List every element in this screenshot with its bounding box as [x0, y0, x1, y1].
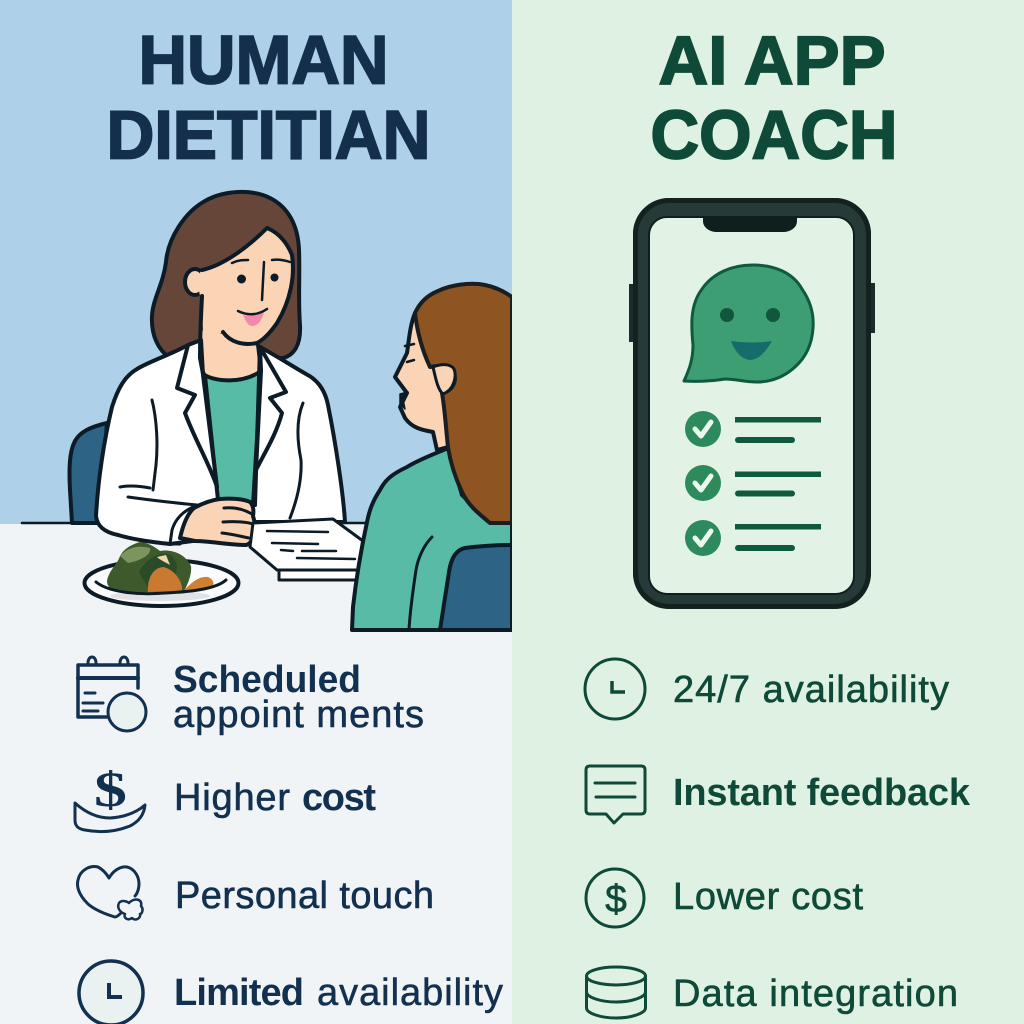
dietitian neck: [188, 330, 260, 380]
right lapel: [256, 347, 286, 470]
item: personal touch: [77, 867, 434, 919]
icon: dollar coin: [586, 869, 644, 927]
dietitian hair: [152, 192, 300, 358]
icon: dollar in hand: [75, 761, 145, 832]
text: 24/7 availability: 24/7 availability: [673, 669, 949, 711]
title: ai app coach: [650, 22, 898, 174]
list: human dietitian features: [75, 657, 503, 1024]
carrot pieces: [148, 567, 182, 592]
text: higher cost: [174, 777, 376, 819]
client ear: [433, 365, 455, 394]
client body: [352, 448, 512, 630]
item: instant feedback: [586, 766, 971, 823]
title: ai app coach: AI APP: [658, 22, 886, 99]
dietitian shirt: [203, 371, 261, 505]
dietitian ear: [185, 269, 205, 295]
illustration: phone: [629, 198, 875, 609]
text: data integration: Data integration: [673, 973, 958, 1015]
document text lines: [267, 531, 355, 559]
icon: database: [586, 967, 646, 1018]
icon: calendar: [78, 657, 146, 731]
side buttons: [629, 283, 875, 342]
coat folds: [120, 400, 303, 518]
phone inner edge: [636, 200, 868, 606]
check item 2: [685, 465, 821, 501]
title: ai app coach: COACH: [650, 96, 898, 174]
text: limited availability: [174, 972, 503, 1014]
text: scheduled appointments: [173, 659, 424, 736]
plate: [84, 560, 238, 606]
item: limited availability: [79, 961, 503, 1024]
dietitian chair: [70, 423, 107, 523]
left lapel: [177, 340, 217, 487]
icon: clock: [79, 961, 143, 1024]
table edge: [22, 522, 366, 524]
documents: [250, 519, 363, 580]
icon: heart and hand: [77, 867, 143, 919]
client mouth: [400, 392, 408, 409]
item: higher cost: [75, 761, 376, 832]
text: limited availability: availability: [317, 972, 503, 1014]
item: 24/7 availability: [585, 659, 949, 719]
text: limited availability: Limited: [174, 972, 304, 1014]
client chair: [440, 545, 512, 630]
dietitian hand: [180, 499, 255, 545]
title: human dietitian: [106, 22, 430, 174]
text: scheduled appointments: appoint ments: [173, 694, 424, 736]
icon: message: [586, 766, 645, 823]
bubble mouth: [731, 341, 772, 360]
dietitian face outline: [200, 228, 293, 374]
checklist: [685, 411, 821, 556]
text: scheduled appointments: Scheduled: [173, 659, 361, 701]
icon: dollar coin: $: [605, 878, 627, 921]
client neck and face: [395, 313, 460, 450]
chat bubble face: [684, 265, 813, 382]
bubble eyes: [720, 308, 780, 322]
dietitian eyes: [237, 274, 278, 284]
check item 3: [685, 520, 821, 556]
phone body: [633, 198, 871, 609]
icon: clock: [585, 659, 645, 719]
fingers: [222, 508, 253, 538]
text: higher cost: cost: [302, 777, 376, 819]
coat cuff: [170, 507, 193, 544]
plate inner rim: [96, 580, 226, 594]
dietitian brows and nose: [232, 260, 290, 300]
text: instant feedback: Instant feedback: [673, 772, 971, 814]
check item 1: [685, 411, 821, 447]
dietitian mouth: [238, 309, 267, 326]
text: personal touch: Personal touch: [175, 875, 434, 917]
coat body: [96, 345, 345, 544]
greens: [107, 542, 191, 593]
panel: ai app coach: [512, 0, 1024, 1024]
text: higher cost: Higher: [174, 777, 290, 819]
notch: [703, 216, 797, 232]
item: data integration: [586, 967, 958, 1018]
dietitian lab coat: [96, 340, 345, 544]
client arm line: [409, 537, 432, 630]
illustration: consultation scene: [22, 192, 512, 630]
dietitian face: [197, 228, 293, 344]
item: lower cost: [586, 869, 863, 927]
title: human dietitian: DIETITIAN: [106, 96, 430, 174]
panel background: [512, 0, 1024, 1024]
item: scheduled appointments: [78, 657, 424, 736]
client eye lashes: [405, 344, 414, 362]
panel: human dietitian: [0, 0, 512, 1024]
plate of food: [84, 542, 238, 606]
wall background: [0, 0, 512, 525]
icon: dollar in hand: $: [94, 761, 127, 817]
screen: [649, 217, 854, 594]
text: lower cost: Lower cost: [673, 876, 863, 918]
client hair: [415, 284, 512, 523]
title: human dietitian: HUMAN: [138, 22, 388, 98]
table and lower background: [0, 524, 512, 1024]
list: ai app coach features: [585, 659, 971, 1018]
